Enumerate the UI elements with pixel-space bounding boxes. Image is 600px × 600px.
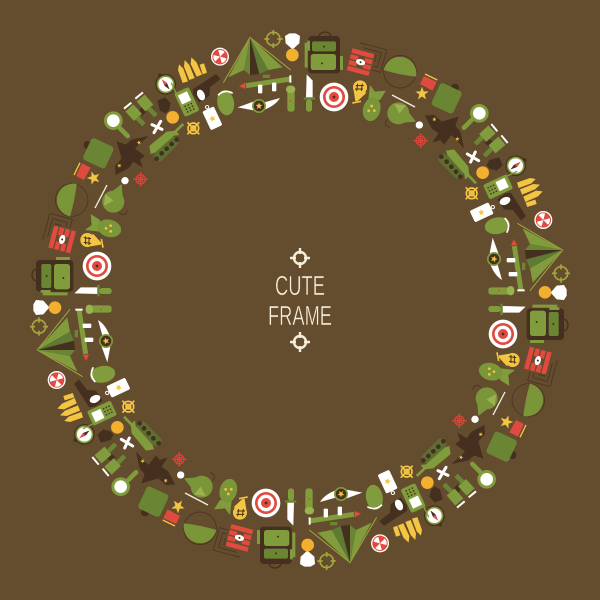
- icon: radiation sign: [211, 48, 229, 66]
- icon: field radio: [483, 169, 523, 200]
- icon: compass: [505, 155, 526, 176]
- icon: flask: [385, 102, 423, 129]
- icon ring: third quadrant: [57, 393, 407, 570]
- white stick: [392, 95, 415, 107]
- icon: white bones: [467, 152, 479, 162]
- icon ring: first quadrant: [193, 30, 543, 207]
- icon: red crosshair: [413, 133, 428, 148]
- icon: top crosshair: [290, 248, 310, 268]
- icon: flashlight: [286, 86, 295, 112]
- icon: medal and dark pouch: [476, 157, 503, 179]
- icon: knife: [304, 74, 315, 112]
- icon: tan crosshair: [264, 30, 283, 48]
- title: [268, 270, 332, 331]
- icon: medal with ribbon: [285, 33, 300, 61]
- icon: pistol: [193, 74, 221, 103]
- icon: target: [320, 83, 348, 111]
- title: CUTE: [275, 270, 325, 301]
- icon: dynamite: [347, 41, 387, 79]
- icon: bullets: [517, 178, 543, 207]
- icon: backpack: [305, 32, 343, 73]
- title: FRAME: [268, 300, 332, 331]
- icon: bottom crosshair: [290, 332, 310, 352]
- icon: binoculars: [475, 124, 508, 156]
- icon: winged badge: [238, 98, 280, 113]
- icon: star medal: [415, 74, 437, 99]
- icon ring: fourth quadrant: [30, 57, 207, 407]
- icon: magnifier: [464, 104, 489, 128]
- icon: fighter jet: [425, 115, 464, 148]
- icon: grenade: [215, 89, 236, 117]
- icon: yellow balloon bomb: [352, 80, 367, 103]
- icon: yellow crosshair: [466, 187, 478, 199]
- icon: tent: [223, 37, 291, 83]
- icon: helmet: [384, 55, 416, 88]
- icon ring: second quadrant: [393, 193, 570, 543]
- icon: canister: [431, 82, 463, 115]
- icon: tank: [437, 149, 476, 183]
- icon: rocket launcher: [239, 75, 291, 93]
- icon: dog tag: [201, 103, 222, 130]
- icon: nuclear bomb: [360, 85, 386, 123]
